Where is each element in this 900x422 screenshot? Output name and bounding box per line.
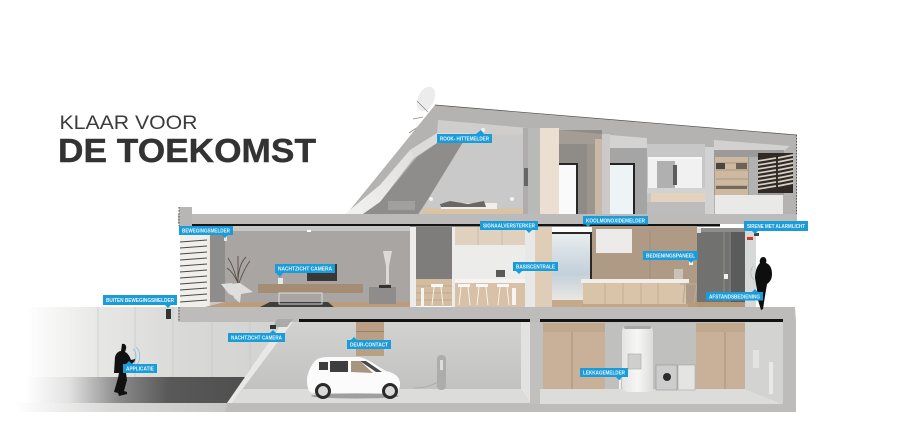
stove block	[369, 287, 396, 304]
label: afstandsbediening: AFSTANDSBEDIENING	[709, 294, 760, 300]
bedroom	[419, 128, 528, 214]
label: rook- hittemelder: ROOK- HITTEMELDER	[440, 136, 489, 142]
label: afstandsbediening	[706, 289, 763, 300]
column and beige wall	[528, 128, 540, 214]
coffee table	[279, 293, 322, 304]
dryer	[678, 365, 695, 390]
label: nachtzicht camera (living room)	[275, 264, 335, 284]
street and exterior wall	[15, 307, 287, 412]
label: signaalversterker: SIGNAALVERSTERKER	[483, 224, 535, 230]
right room with shelves and shutters	[714, 140, 793, 214]
control panel	[689, 259, 693, 265]
dining chairs	[431, 284, 509, 305]
label: nachtzicht camera (garage): NACHTZICHT CAMERA	[231, 336, 282, 342]
extractor hood	[596, 229, 632, 253]
second room with window	[610, 135, 647, 214]
stools	[680, 284, 697, 303]
ceiling plane	[437, 120, 528, 134]
washing machine	[656, 365, 677, 390]
shutters	[758, 153, 793, 193]
charger	[414, 355, 446, 390]
television	[307, 264, 337, 281]
label: koolmonoxidemelder: KOOLMONOXIDEMELDER	[586, 218, 645, 224]
ramp wall strip	[227, 322, 293, 403]
windows	[319, 361, 348, 372]
lamp	[383, 251, 392, 284]
label: bewegingsmelder	[179, 226, 233, 238]
label: koolmonoxidemelder	[583, 216, 648, 227]
bathroom	[647, 144, 705, 214]
title line: de toekomst: DE TOEKOMST	[58, 133, 317, 170]
ceiling spot	[307, 230, 311, 232]
label: nachtzicht camera (garage)	[228, 330, 285, 342]
first floor slab	[178, 207, 797, 226]
glass door	[697, 228, 747, 308]
tv unit	[258, 284, 363, 293]
label: bedieningspaneel: BEDIENINGSPANEEL	[646, 254, 696, 260]
rug	[258, 302, 335, 308]
floor	[205, 302, 410, 307]
armchairs	[221, 283, 253, 303]
label: applicatie: APPLICATIE	[126, 366, 154, 372]
label: bewegingsmelder: BEWEGINGSMELDER	[182, 228, 230, 234]
label: lekkagemelder	[580, 368, 628, 389]
person with phone	[114, 344, 140, 396]
car	[307, 357, 400, 399]
title	[58, 112, 317, 170]
plant	[227, 256, 250, 283]
attic side wall	[363, 143, 468, 214]
label: sirene met alarmlicht: SIRENE MET ALARMLICHT	[747, 224, 806, 230]
outdoor sensor	[166, 309, 171, 319]
label: basiscentrale: BASISCENTRALE	[516, 264, 555, 270]
label: rook- hittemelder	[437, 128, 492, 143]
exterior wall	[745, 229, 756, 307]
label: nachtzicht camera (living room): NACHTZICHT CAMERA	[278, 266, 332, 272]
window	[552, 232, 592, 302]
wheels	[315, 383, 331, 399]
label: deur-contact	[347, 337, 391, 349]
upper floor	[345, 105, 797, 216]
boiler	[622, 326, 653, 392]
camera	[270, 325, 276, 329]
utility room	[540, 319, 783, 404]
label: applicatie	[123, 361, 157, 373]
column	[530, 322, 540, 404]
label: signaalversterker	[480, 221, 538, 233]
sensor	[224, 236, 227, 241]
wifi signal	[133, 347, 140, 365]
bulkhead	[410, 133, 470, 158]
tablet on counter	[496, 270, 505, 277]
label: lekkagemelder: LEKKAGEMELDER	[583, 370, 625, 376]
hallway room	[559, 130, 602, 214]
garage	[232, 319, 530, 403]
kitchen wall	[592, 226, 697, 302]
column	[525, 227, 535, 307]
roof shell	[345, 105, 797, 216]
living room	[180, 226, 411, 308]
label: buiten bewegingsmelder: BUITEN BEWEGINGSMELDER	[106, 298, 174, 304]
label: deur-contact: DEUR-CONTACT	[350, 342, 389, 348]
label: bedieningspaneel	[643, 251, 698, 263]
person with remote	[751, 257, 772, 310]
satellite dish	[409, 84, 439, 133]
louvres	[180, 240, 207, 302]
label: basiscentrale	[513, 262, 558, 274]
basement shell	[225, 319, 796, 412]
ground floor slab	[178, 307, 796, 322]
slanted white facade strip	[345, 145, 421, 214]
label: buiten bewegingsmelder	[103, 295, 177, 308]
label: sirene met alarmlicht	[744, 221, 808, 234]
title line: klaar voor: KLAAR VOOR	[60, 112, 198, 134]
central dark wall and kitchen	[410, 226, 759, 308]
island	[581, 279, 689, 307]
